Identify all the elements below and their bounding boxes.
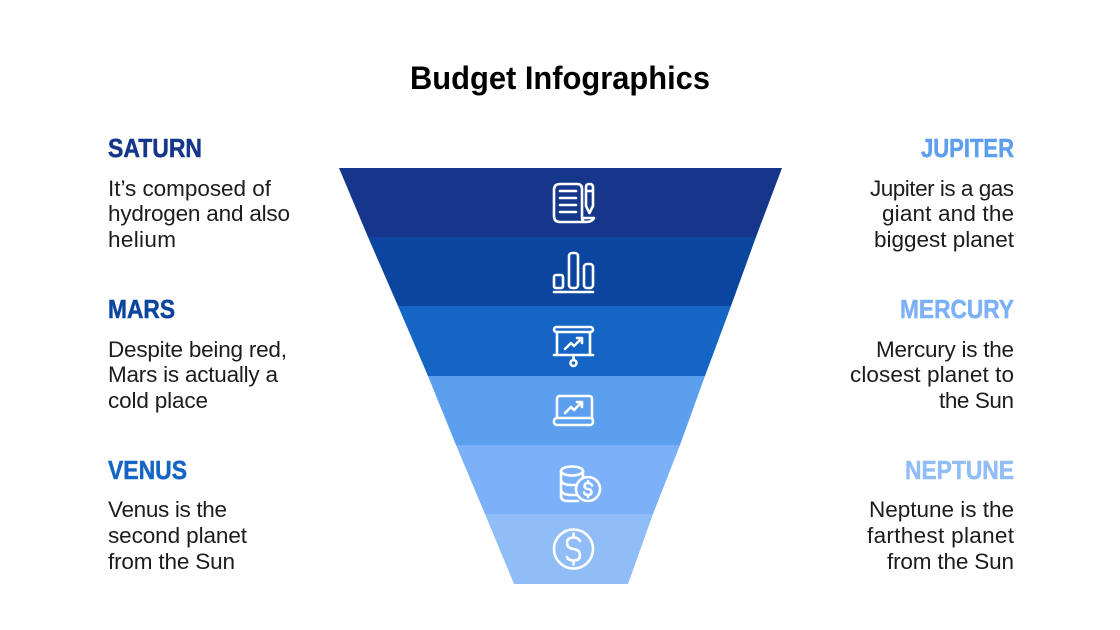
heading: Saturn: SATURN xyxy=(108,133,202,163)
text: Venus description: second planet xyxy=(108,523,248,548)
funnel band 5 xyxy=(456,445,680,514)
heading: Neptune: NEPTUNE xyxy=(905,455,1014,485)
text: Neptune description xyxy=(867,497,1015,574)
funnel band 4 xyxy=(428,376,705,445)
block: Venus xyxy=(108,455,248,574)
funnel band 6 xyxy=(485,514,653,584)
text: Mars description xyxy=(108,337,287,413)
icon: bar chart xyxy=(554,253,593,292)
icon: presentation board xyxy=(554,327,593,366)
text: Jupiter description: biggest planet xyxy=(874,227,1015,252)
text: Venus description: from the Sun xyxy=(108,549,235,574)
block: Jupiter xyxy=(870,133,1015,252)
text: Jupiter description xyxy=(870,176,1015,252)
text: Mercury description: closest planet to xyxy=(850,362,1014,387)
heading: Mercury: MERCURY xyxy=(900,294,1014,324)
text: Mercury description: Mercury is the xyxy=(876,337,1014,362)
icon: dollar circle xyxy=(554,530,593,568)
heading: Mars: MARS xyxy=(108,294,175,324)
block: Mars xyxy=(108,294,287,413)
icon: laptop with chart xyxy=(554,396,593,425)
block: Neptune xyxy=(867,455,1015,574)
heading: Venus: VENUS xyxy=(108,455,187,485)
text: Neptune description: from the Sun xyxy=(887,549,1014,574)
title: Budget Infographics xyxy=(410,60,710,96)
text: Jupiter description: Jupiter is a gas xyxy=(870,176,1014,201)
text: Saturn description: hydrogen and also xyxy=(108,201,290,226)
block: Mercury xyxy=(850,294,1014,413)
text: Jupiter description: giant and the xyxy=(882,201,1014,226)
text: Neptune description: farthest planet xyxy=(867,523,1015,548)
text: Mars description: Despite being red, xyxy=(108,337,287,362)
funnel band 3 xyxy=(398,306,731,376)
text: Saturn description: helium xyxy=(108,227,176,252)
text: Venus description: Venus is the xyxy=(108,497,227,522)
text: Mars description: Mars is actually a xyxy=(108,362,278,387)
funnel chart xyxy=(339,168,782,584)
heading: Jupiter: JUPITER xyxy=(921,133,1014,163)
funnel band 1 xyxy=(339,168,782,237)
text: Neptune description: Neptune is the xyxy=(869,497,1014,522)
text: Mercury description xyxy=(850,337,1014,413)
icon: coins with dollar xyxy=(561,466,600,501)
text: Saturn description xyxy=(108,176,290,252)
text: Mars description: cold place xyxy=(108,388,208,413)
text: Saturn description: It’s composed of xyxy=(108,176,272,201)
text: Mercury description: the Sun xyxy=(939,388,1014,413)
funnel band 2 xyxy=(368,237,756,306)
text: Venus description xyxy=(108,497,248,574)
icon: document and pencil xyxy=(554,184,594,222)
block: Saturn xyxy=(108,133,290,252)
